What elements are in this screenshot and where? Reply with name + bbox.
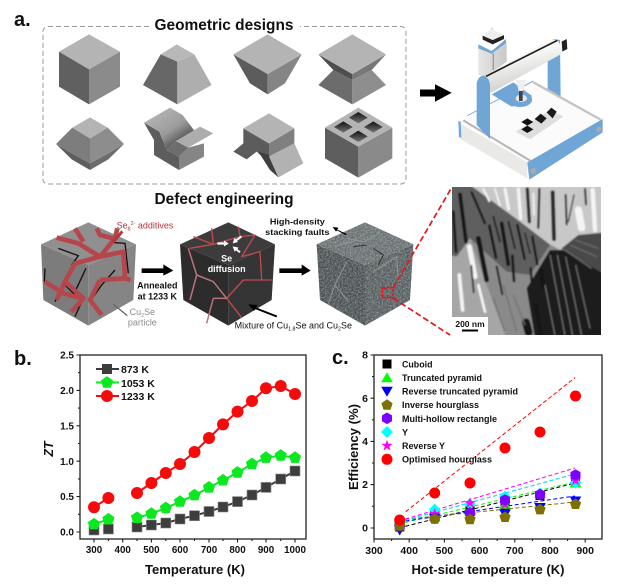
- micrograph: upper light grain: [470, 185, 607, 250]
- chart c legend: Reverse Y: [402, 441, 445, 451]
- label: Cu2Se particle: particle: [128, 318, 157, 328]
- chart c y tick labels: 0: [362, 522, 368, 534]
- chart c y axis title: Efficiency (%): [346, 404, 361, 490]
- series: optimised hourglass: [394, 390, 581, 526]
- pointer: additives: [111, 230, 123, 242]
- chart c x tick labels: 400: [400, 545, 418, 557]
- micrograph: bright streaks: [459, 189, 595, 312]
- panel label a: a.: [14, 9, 31, 31]
- series: cuboid: [395, 478, 580, 532]
- panel label b: b.: [14, 348, 32, 370]
- heading background: [150, 18, 300, 34]
- chart b x tick labels: 700: [201, 545, 218, 556]
- pointer: particle: [113, 304, 127, 316]
- chart c y tick labels: [362, 350, 368, 534]
- chart b x tick labels: 800: [229, 545, 246, 556]
- chart c x tick labels: 600: [471, 545, 489, 557]
- micrograph: upper left dark band: [450, 185, 550, 275]
- chart b x tick labels: 400: [115, 545, 131, 556]
- shape: inverse hourglass: [318, 34, 386, 104]
- label: stacking faults: High-density: [270, 216, 325, 226]
- label: mixture of phases: Se and Cu: [296, 320, 338, 330]
- chart c x tick labels: 500: [436, 545, 453, 557]
- chart b y tick labels: 1.0: [60, 457, 74, 468]
- label: annealed at 1233 K: at 1233 K: [138, 291, 178, 301]
- series: multi-hollow rectangle: [395, 469, 580, 532]
- printer blue edge: [527, 119, 603, 180]
- label: mixture of phases: Se: [341, 320, 352, 330]
- chart b x tick labels: 900: [258, 545, 275, 556]
- label: Cu2Se particle: Se: [144, 307, 155, 317]
- printer front face: [459, 123, 527, 178]
- micrograph: dark spindles upper grain: [527, 189, 586, 239]
- chart b: ZT versus temperature: [42, 350, 306, 577]
- series: inverse hourglass: [394, 498, 581, 531]
- arrow: to stacking faults: [279, 264, 311, 276]
- chart b y tick labels: 0.5: [60, 492, 74, 503]
- printer motor: [478, 28, 507, 77]
- printer beam: [486, 39, 567, 93]
- shape: reverse truncated pyramid: [233, 34, 302, 94]
- chart b legend: 1233 K: [121, 391, 155, 403]
- label: Se8 additives: additives: [135, 220, 174, 230]
- printer arm and nozzle: [492, 80, 532, 107]
- scale bar: 200 nm: [455, 319, 485, 329]
- TEM micrograph: [450, 185, 607, 338]
- cube: stacking faults: [317, 222, 413, 326]
- chart c x tick labels: 700: [506, 545, 524, 557]
- chart b legend: 1053 K: [121, 378, 155, 390]
- chart c y tick labels: 2: [362, 479, 368, 491]
- printed parts tray: [516, 108, 563, 139]
- chart c axes: [370, 355, 602, 542]
- chart c y tick labels: 6: [362, 393, 368, 405]
- chart b y tick labels: 2.5: [60, 350, 74, 362]
- printer right column: [548, 39, 561, 98]
- chart b x tick labels: 500: [143, 545, 160, 556]
- chart b x tick labels: 300: [86, 545, 103, 556]
- chart c x axis title: Hot-side temperature (K): [412, 562, 564, 577]
- chart c x tick labels: 900: [576, 545, 594, 557]
- chart c y tick labels: 8: [362, 350, 368, 362]
- label: mixture of phases: Mixture of Cu: [235, 320, 288, 330]
- shape: cuboid: [59, 34, 120, 104]
- micrograph: lower right dark grain: [527, 250, 607, 338]
- chart b x tick labels: 1000: [284, 545, 306, 556]
- series: truncated pyramid: [394, 477, 581, 530]
- label: Se8 additives: Se: [117, 220, 128, 230]
- series: 1233 K: [88, 380, 301, 513]
- chart b axes: [76, 355, 306, 542]
- chart c y tick labels: 4: [362, 436, 368, 448]
- printer bolts: [530, 127, 602, 174]
- defect engineering diagram: [41, 216, 413, 332]
- selection square: [382, 288, 393, 298]
- arrow: stacking faults pointer: [333, 227, 347, 235]
- heading: geometric designs: Geometric designs: [154, 17, 294, 34]
- arrow: anneal: [142, 264, 173, 276]
- label: annealed at 1233 K: Annealed: [137, 281, 178, 291]
- chart c legend: Cuboid: [402, 360, 432, 370]
- icons: diffusion arrows: [217, 236, 242, 253]
- shape: optimised hourglass: [56, 117, 124, 170]
- panel label c: c.: [332, 347, 349, 369]
- chart c legend: Y: [402, 428, 408, 438]
- arrow: designs to printer: [420, 84, 452, 102]
- shape: truncated pyramid: [143, 44, 212, 104]
- chart c legend: Reverse truncated pyramid: [402, 386, 518, 396]
- label: mixture of phases: 2: [338, 326, 341, 332]
- chart c legend: Optimised hourglass: [402, 454, 492, 464]
- shape: multi-hollow rectangle: [325, 108, 392, 178]
- label: Se diffusion: Se: [221, 253, 232, 263]
- series: reverse truncated pyramid: [394, 496, 581, 536]
- chart b x tick labels: 600: [172, 545, 189, 556]
- micrograph: dark spindles in band: [453, 192, 543, 338]
- shape: reverse Y: [233, 113, 303, 177]
- cube: Se diffusion: [180, 222, 275, 326]
- label: mixture of phases: 1.8: [288, 326, 296, 332]
- chart c x tick labels: 800: [541, 545, 559, 557]
- chart c fit lines: [399, 378, 575, 528]
- series: 1053 K: [88, 449, 301, 529]
- chart b y tick labels: 0.0: [60, 528, 74, 538]
- zoom lines to micrograph: [393, 187, 452, 335]
- chart b y tick labels: 1.5: [60, 422, 74, 432]
- chart c: efficiency versus hot-side temperature: [346, 350, 602, 577]
- geometric shapes group: [56, 34, 392, 178]
- chart b legend: [96, 364, 155, 403]
- label: stacking faults second line: stacking faults: [265, 227, 330, 237]
- series: Y: [394, 477, 582, 529]
- micrograph: fringe lines: [493, 240, 598, 336]
- chart b y axis title: ZT: [42, 440, 56, 458]
- label: Cu2Se particle: Cu: [130, 307, 141, 317]
- chart b y tick labels: 2.0: [60, 386, 74, 397]
- chart c legend: Multi-hollow rectangle: [402, 414, 497, 424]
- label: Se8 additives: 2-: [131, 221, 136, 227]
- shape: Y: [144, 108, 213, 170]
- 3D printer illustration: [458, 28, 603, 180]
- dashed box: geometric designs: [43, 26, 406, 184]
- label: Se8 additives: 8: [128, 226, 131, 232]
- arrow: mixture pointer: [248, 304, 277, 317]
- micrograph: lower left light grain: [450, 238, 507, 338]
- chart c legend: Inverse hourglass: [402, 400, 479, 410]
- chart c legend: [381, 360, 518, 465]
- micrograph: right grain: [562, 232, 601, 272]
- chart c x tick labels: 300: [365, 545, 383, 557]
- series: reverse Y: [394, 474, 581, 529]
- chart c legend: Truncated pyramid: [402, 373, 482, 383]
- label: Se diffusion: diffusion: [208, 264, 246, 274]
- heading: defect engineering: Defect engineering: [154, 191, 294, 208]
- chart b x axis title: Temperature (K): [145, 562, 245, 577]
- printer bed: [460, 81, 603, 163]
- chart b y tick labels: [60, 350, 74, 538]
- cube: Cu2Se with additives: [41, 222, 136, 326]
- series: 873 K: [89, 466, 300, 535]
- chart b legend: 873 K: [121, 364, 149, 376]
- chart c x tick labels: [365, 545, 594, 557]
- label: Cu2Se particle: 2: [141, 313, 144, 319]
- printer left column: [477, 76, 490, 139]
- chart b x tick labels: [86, 545, 306, 556]
- scale bar: [452, 317, 488, 335]
